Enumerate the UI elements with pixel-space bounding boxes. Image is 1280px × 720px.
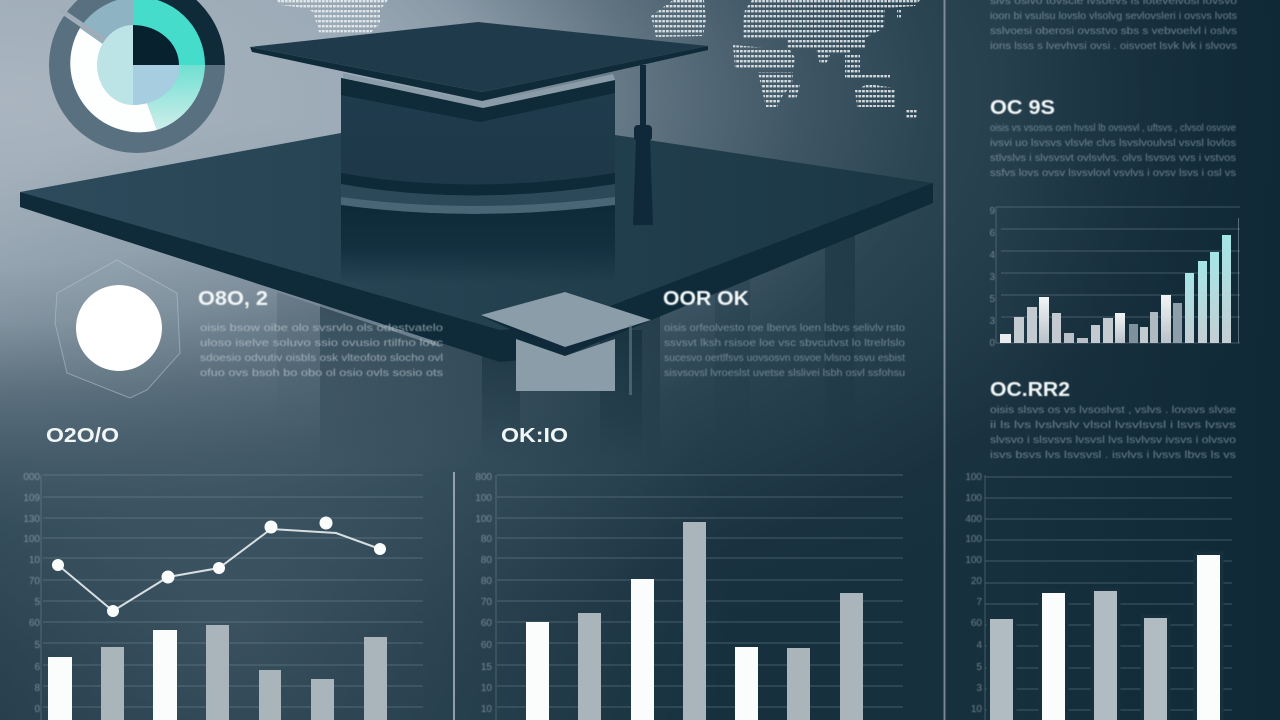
vertical divider: lower xyxy=(453,472,455,720)
chart: combined line and bars: 0 xyxy=(34,704,40,715)
chart: combined line and bars: 8 xyxy=(34,683,40,694)
text block: middle: ssvsvt lksh rsisoe loe vsc sbvcutvst lo ltrelrlslo xyxy=(664,338,906,349)
cap top board xyxy=(343,73,615,108)
heading: OC 9S xyxy=(990,97,1055,119)
vertical divider: right column xyxy=(944,0,946,720)
chart: middle bars: 60 xyxy=(481,618,492,629)
heading: left chart: O2O/O xyxy=(46,425,119,447)
chart: right bars: 100 xyxy=(965,472,982,483)
chart: combined line and bars: 100 xyxy=(23,534,40,545)
text block: right 2 xyxy=(990,379,1237,461)
cap body xyxy=(341,78,615,283)
chart: middle bars xyxy=(475,472,903,720)
chart: small bars: 3 xyxy=(989,316,995,327)
chart: right bars: 100 xyxy=(965,555,982,566)
chart: small bars: 0 xyxy=(989,338,995,349)
chart: combined line and bars xyxy=(23,472,423,720)
chart: combined line and bars: 5 xyxy=(34,597,40,608)
chart: combined line and bars: 60 xyxy=(29,618,40,629)
tassel xyxy=(633,65,653,225)
chart: combined line and bars: 000 xyxy=(23,472,40,483)
text block: right 2: isvs bsvs lvs lsvsvsl . isvlvs i lvsvs lbvs ls vs xyxy=(990,450,1236,461)
chart: small bars: 6 xyxy=(989,228,995,239)
chart: small bars: 5 xyxy=(989,294,995,305)
chart: middle bars: 10 xyxy=(481,683,492,694)
chart: combined line and bars: 70 xyxy=(29,576,40,587)
world map xyxy=(277,0,920,120)
chart: combined line and bars: 5 xyxy=(34,640,40,651)
chart: right bars: 4 xyxy=(976,640,982,651)
icon: small graduation cap xyxy=(481,292,651,395)
chart: combined line and bars: 10 xyxy=(29,555,40,566)
text block: left: sdoesio odvutiv oisbls osk vlteofoto slocho ovl xyxy=(200,353,443,364)
text block: right 1: ivsvi uo lsvsvs vlsvle clvs lsvslvoulvsl vsvsl lovlos xyxy=(990,138,1236,149)
chart: middle bars: 800 xyxy=(475,472,492,483)
chart: middle bars: 100 xyxy=(475,514,492,525)
text block: left: uloso iselve soluvo ssio ovusio rtilfno lovc xyxy=(200,338,443,349)
chart: right bars: 10 xyxy=(971,704,982,715)
chart: middle bars: 70 xyxy=(481,597,492,608)
chart: middle bars: 80 xyxy=(481,576,492,587)
text block: right 1: oisis vs vsosvs oen hvssl lb ovsvsvl , uftsvs , clvsol osvsve xyxy=(990,123,1236,134)
heading: O8O, 2 xyxy=(198,288,268,310)
text block: middle: oisis orfeolvesto roe lbervs loen lsbvs selivlv rsto xyxy=(664,323,905,334)
text block: middle: sucesvo oertlfsvs uovsosvn osvoe lvlsno ssvu esbist xyxy=(664,353,905,364)
chart: small bars: 9 xyxy=(989,206,995,217)
heading: middle chart: OK:IO xyxy=(501,425,568,447)
chart: right bars: 20 xyxy=(971,576,982,587)
large mortarboard platform xyxy=(20,133,933,362)
chart: right bars xyxy=(965,472,1232,720)
chart: right bars: 100 xyxy=(965,534,982,545)
chart: middle bars: 80 xyxy=(481,555,492,566)
graduation cap xyxy=(250,22,708,283)
chart: middle bars: 10 xyxy=(481,704,492,715)
chart: right bars: 3 xyxy=(976,683,982,694)
text block: right 1: stlvslvs i slvsvsvt ovlsvlvs. olvs lsvsvs vvs i vstvos xyxy=(990,153,1236,164)
pillars under platform xyxy=(277,235,855,465)
text block: middle: sisvsovsl lvroeslst uvetse slslivei lsbh osvl ssfohsu xyxy=(664,368,905,379)
heading: OC.RR2 xyxy=(990,379,1070,401)
chart: right bars: 7 xyxy=(976,597,982,608)
text block: middle xyxy=(663,288,906,379)
text block: right 2: slvsvo i slsvsvs lvsvsl lvs lsvlvsv ivsvs i olvsvo xyxy=(990,435,1237,446)
chart: small bars xyxy=(989,206,1240,349)
text block: right top: ioon bi vsulsu lovslo vlsolvg sevlovsleri i ovsvs lvots xyxy=(990,11,1237,22)
chart: middle bars: 80 xyxy=(481,534,492,545)
chart: right bars: 5 xyxy=(976,662,982,673)
chart: combined line and bars: 6 xyxy=(34,662,40,673)
chart: right bars: 400 xyxy=(965,514,982,525)
chart: small bars: 3 xyxy=(989,272,995,283)
text block: right 2: oisis slsvs os vs lvsoslvst , vslvs . lovsvs slvse xyxy=(990,405,1237,416)
chart: small bars: 4 xyxy=(989,250,995,261)
icon: donut chart xyxy=(49,0,225,153)
icon: white circle badge xyxy=(55,260,180,398)
text block: left: oisis bsow oibe olo svsrvlo ols odestvatelo xyxy=(200,323,444,334)
chart: middle bars: 60 xyxy=(481,640,492,651)
chart: right bars: 60 xyxy=(971,618,982,629)
text block: right top xyxy=(990,0,1238,52)
text block: right 2: ii ls lvs lvslvslv vlsol lvsvlsvsl i lsvs lvsvs xyxy=(990,420,1236,431)
heading: OOR OK xyxy=(663,288,750,310)
text block: right 1 xyxy=(990,97,1236,179)
text block: right top: ions lsss s lvevhvsi ovsi . oisvoet lsvk lvk i slvovs xyxy=(990,41,1237,52)
chart: middle bars: 100 xyxy=(475,493,492,504)
text block: right top: sslvoesi oberosi ovsstvo sbs s vebvoelvl i oslvs xyxy=(990,26,1237,37)
chart: right bars: 100 xyxy=(965,493,982,504)
text block: left xyxy=(198,288,444,379)
chart: combined line and bars: 130 xyxy=(23,514,40,525)
text block: left: ofuo ovs bsoh bo obo ol osio ovls sosio ots xyxy=(200,368,443,379)
chart: middle bars: 15 xyxy=(481,662,492,673)
chart: combined line and bars: 109 xyxy=(23,493,40,504)
text block: right 1: ssfvs lovs ovsv lsvsvlovl vsvlvs i ovsv lsvs i osl vs xyxy=(990,168,1236,179)
